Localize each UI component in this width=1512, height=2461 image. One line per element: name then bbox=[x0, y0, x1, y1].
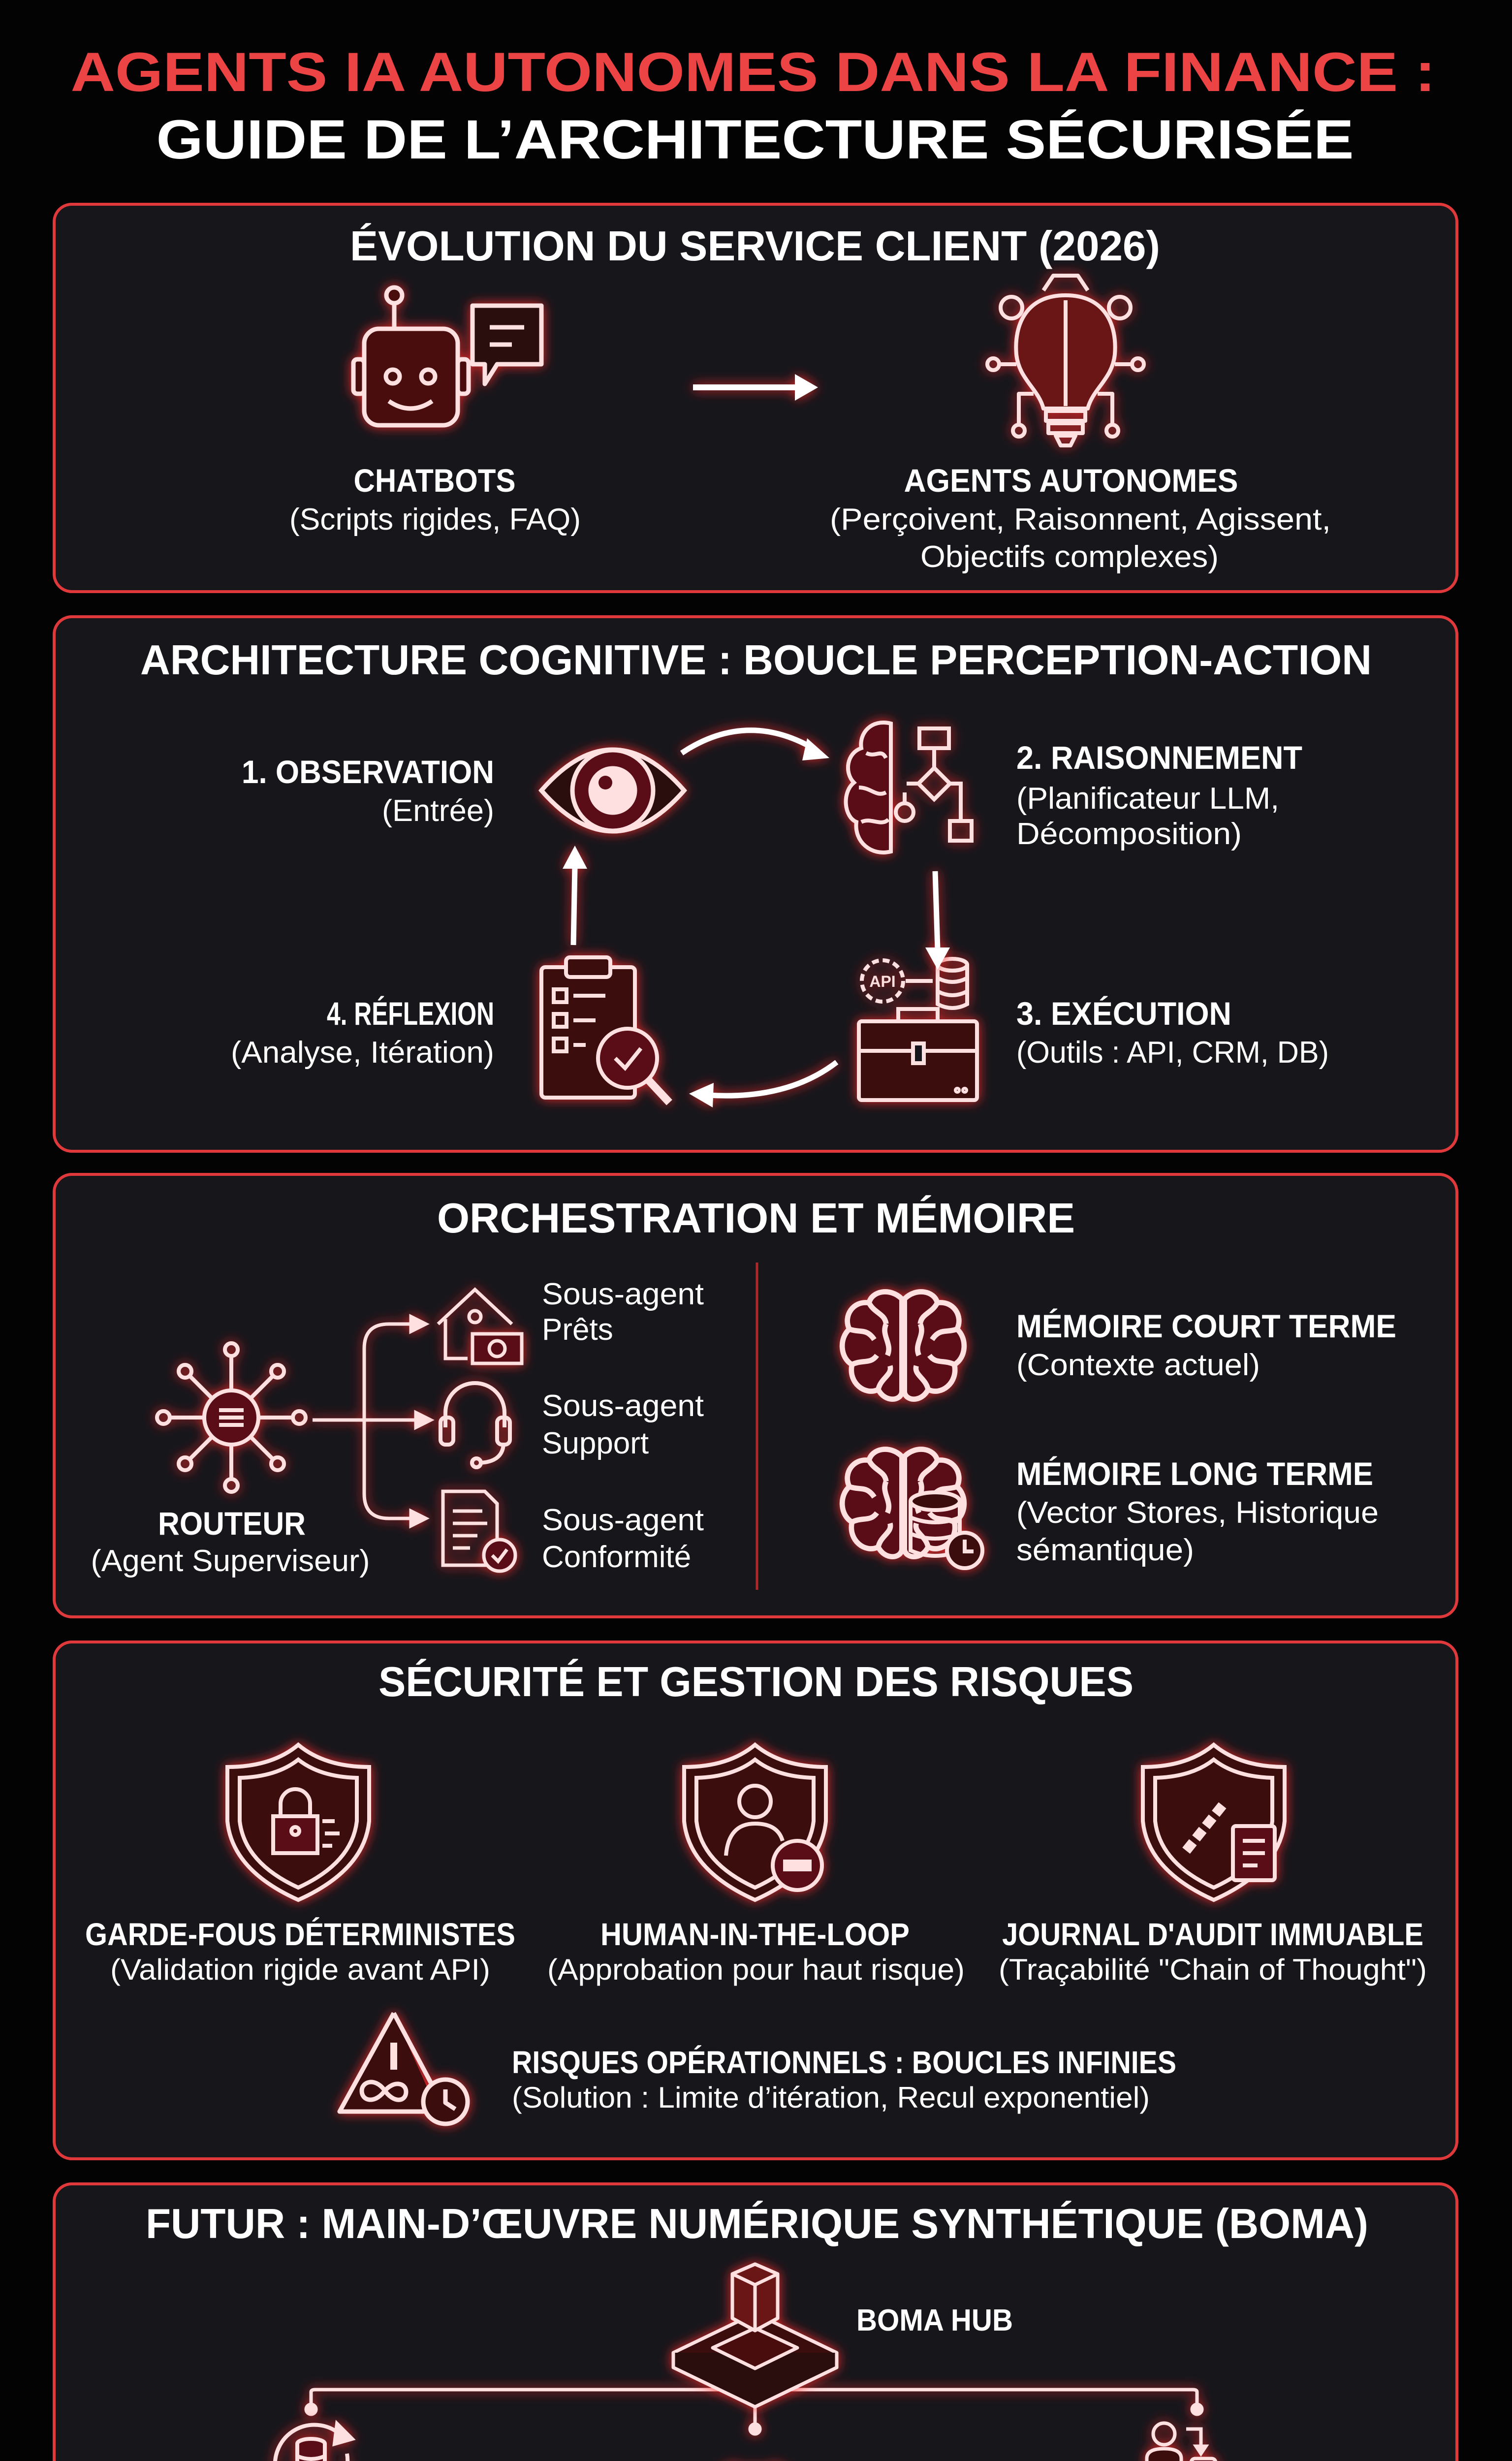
text: agents autonomes bbox=[830, 462, 1331, 574]
text: observation: (Entrée) bbox=[382, 794, 494, 828]
text: raisonnement bbox=[1016, 739, 1302, 851]
icon: brain bulb bbox=[987, 276, 1144, 445]
title: GUIDE DE L’ARCHITECTURE SÉCURISÉE bbox=[157, 109, 1354, 170]
text: memory long: MÉMOIRE LONG TERME bbox=[1016, 1455, 1373, 1492]
text: sub-agents: Conformité bbox=[542, 1540, 691, 1574]
icon: shield lock bbox=[227, 1745, 369, 1900]
heading: future: FUTUR : MAIN-D’ŒUVRE NUMÉRIQUE SYNTHÉTIQUE (BOMA) bbox=[146, 2201, 1368, 2247]
text: sub-agents bbox=[542, 1277, 704, 1574]
icon: clipboard bbox=[541, 957, 669, 1103]
text: human in the loop: (Approbation pour haut risque) bbox=[547, 1953, 965, 1986]
text: execution: (Outils : API, CRM, DB) bbox=[1016, 1036, 1329, 1070]
icon: brain short-term bbox=[842, 1292, 964, 1399]
text: sub-agents: Sous-agent bbox=[542, 1503, 704, 1537]
icon: toolbox bbox=[859, 959, 977, 1100]
heading: security: SÉCURITÉ ET GESTION DES RISQUES bbox=[378, 1659, 1134, 1705]
text: observation: 1. OBSERVATION bbox=[242, 754, 494, 790]
text: human in the loop bbox=[547, 1917, 965, 1986]
text: guardrails bbox=[85, 1917, 515, 1986]
text: raisonnement: 2. RAISONNEMENT bbox=[1016, 739, 1302, 776]
text: execution: 3. EXÉCUTION bbox=[1016, 995, 1231, 1032]
panel: evolution bbox=[54, 204, 1457, 592]
icon: brain long-term bbox=[842, 1450, 982, 1568]
text: sub-agents: Sous-agent bbox=[542, 1277, 704, 1311]
heading: evolution: ÉVOLUTION DU SERVICE CLIENT (2026) bbox=[350, 223, 1160, 270]
text: human in the loop: HUMAN-IN-THE-LOOP bbox=[600, 1917, 910, 1952]
text: raisonnement: (Planificateur LLM, bbox=[1016, 782, 1279, 816]
icon: toolbox: API bbox=[869, 973, 896, 990]
panel: security bbox=[54, 1642, 1457, 2159]
text: chatbots: CHATBOTS bbox=[353, 462, 516, 499]
icon: boma hub bbox=[673, 2264, 837, 2407]
icon: eye bbox=[541, 750, 684, 831]
icon: shield chain journal bbox=[1143, 1745, 1285, 1900]
arrows: router branches bbox=[313, 1317, 431, 1526]
icon: headset support bbox=[441, 1383, 510, 1467]
icon: document compliance bbox=[443, 1491, 515, 1571]
icon: shield human bbox=[684, 1745, 826, 1900]
text: chatbots: (Scripts rigides, FAQ) bbox=[289, 503, 581, 536]
text: raisonnement: Décomposition) bbox=[1016, 817, 1242, 851]
text: agents autonomes: (Perçoivent, Raisonnent, Agissent, bbox=[830, 503, 1331, 536]
text: boma hub: BOMA HUB bbox=[856, 2303, 1013, 2337]
icon: house loans bbox=[438, 1290, 522, 1363]
connector lines bbox=[306, 2390, 1202, 2434]
text: audit bbox=[999, 1917, 1427, 1986]
text: guardrails: (Validation rigide avant API) bbox=[110, 1953, 490, 1986]
arrows: loop bbox=[563, 730, 950, 1107]
icon: warning infinite loop bbox=[340, 2013, 468, 2124]
text: execution bbox=[1016, 995, 1329, 1070]
text: memory long: sémantique) bbox=[1016, 1533, 1194, 1567]
icon: chatbot bbox=[353, 287, 541, 425]
text: memory long bbox=[1016, 1455, 1379, 1567]
icon: reasoning brain flowchart bbox=[846, 723, 972, 852]
text: operational risks bbox=[512, 2045, 1176, 2114]
text: memory long: (Vector Stores, Historique bbox=[1016, 1496, 1379, 1530]
text: agents autonomes: Objectifs complexes) bbox=[920, 540, 1219, 574]
panel: orchestration bbox=[54, 1174, 1457, 1617]
panel: cognitive loop bbox=[54, 617, 1457, 1151]
text: chatbots bbox=[289, 462, 581, 536]
title: AGENTS IA AUTONOMES DANS LA FINANCE : bbox=[71, 41, 1435, 103]
text: memory short bbox=[1016, 1308, 1396, 1382]
heading: cognitive: ARCHITECTURE COGNITIVE : BOUCLE PERCEPTION-ACTION bbox=[140, 637, 1372, 684]
text: agents autonomes: AGENTS AUTONOMES bbox=[904, 462, 1238, 499]
icon: sync database bbox=[271, 2424, 352, 2461]
icon: human and robot bbox=[1147, 2423, 1218, 2461]
text: router: (Agent Superviseur) bbox=[91, 1544, 370, 1578]
text: audit: (Traçabilité "Chain of Thought") bbox=[999, 1953, 1427, 1986]
text: observation bbox=[242, 754, 494, 828]
arrow bbox=[693, 374, 818, 401]
text: router: ROUTEUR bbox=[158, 1505, 306, 1542]
text: audit: JOURNAL D'AUDIT IMMUABLE bbox=[1002, 1917, 1423, 1952]
panel: future boma bbox=[54, 2184, 1457, 2461]
icon: router bbox=[157, 1343, 306, 1492]
text: reflexion: (Analyse, Itération) bbox=[231, 1036, 494, 1070]
text: guardrails: GARDE-FOUS DÉTERMINISTES bbox=[85, 1917, 515, 1952]
text: memory short: (Contexte actuel) bbox=[1016, 1348, 1260, 1382]
text: operational risks: RISQUES OPÉRATIONNELS : BOUCLES INFINIES bbox=[512, 2045, 1176, 2080]
title bbox=[71, 41, 1435, 170]
text: memory short: MÉMOIRE COURT TERME bbox=[1016, 1308, 1396, 1344]
text: operational risks: (Solution : Limite d’itération, Recul exponentiel) bbox=[512, 2081, 1150, 2114]
text: sub-agents: Sous-agent bbox=[542, 1389, 704, 1423]
text: sub-agents: Support bbox=[542, 1426, 649, 1460]
text: router bbox=[91, 1505, 370, 1578]
text: reflexion: 4. RÉFLEXION bbox=[327, 995, 494, 1032]
text: sub-agents: Prêts bbox=[542, 1313, 613, 1347]
heading: orchestration: ORCHESTRATION ET MÉMOIRE bbox=[437, 1195, 1075, 1242]
text: reflexion bbox=[231, 995, 494, 1070]
